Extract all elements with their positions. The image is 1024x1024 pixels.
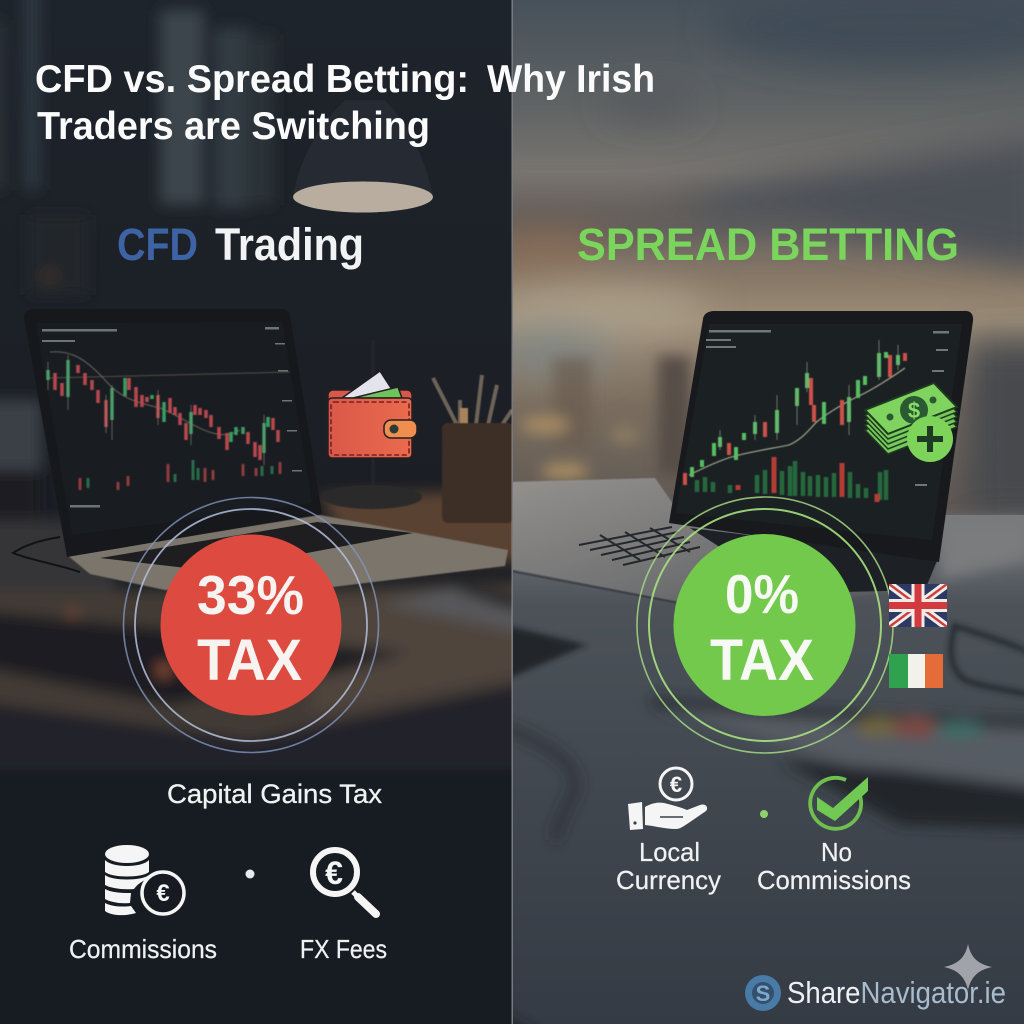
title: Traders are Switching bbox=[37, 105, 430, 148]
title: CFD vs. Spread Betting: bbox=[35, 58, 469, 101]
separator dot bbox=[760, 810, 768, 818]
label: Capital Gains Tax: Capital Gains Tax bbox=[167, 779, 383, 809]
logo: ShareNavigator.ie: S bbox=[756, 981, 770, 1006]
label: No Commissions bbox=[758, 842, 910, 890]
label: No Commissions: No bbox=[821, 837, 852, 867]
icon: magnifier with euro bbox=[313, 850, 376, 914]
icon: hand holding euro: € bbox=[670, 772, 682, 797]
icon: sparkle mark bbox=[944, 944, 992, 990]
badge: 33% tax bbox=[124, 498, 378, 752]
icon: Irish flag bbox=[889, 654, 943, 688]
laptop: CFD bbox=[24, 309, 508, 590]
icon: banknotes with plus: $ bbox=[908, 398, 920, 423]
blurred distant buildings and lights bbox=[521, 356, 690, 479]
screen menu and axis ticks bbox=[42, 327, 302, 508]
panel: CFD trading (left) bbox=[0, 0, 512, 958]
blurred office background bbox=[0, 0, 512, 766]
heading: CFD Trading: Trading bbox=[215, 219, 364, 270]
title bbox=[35, 58, 655, 148]
heading: CFD Trading bbox=[118, 227, 362, 270]
title: Why Irish bbox=[487, 58, 655, 101]
label: Local Currency: Local bbox=[639, 837, 700, 867]
label: Local Currency bbox=[616, 837, 721, 895]
label: FX Fees: FX Fees bbox=[300, 934, 387, 964]
badge: 0% tax: 0% bbox=[725, 563, 799, 625]
screen menu text bbox=[706, 330, 949, 486]
icon: coins stack with euro: € bbox=[156, 880, 170, 907]
badge: 0% tax: TAX bbox=[710, 628, 814, 693]
badge: 33% tax: TAX bbox=[197, 628, 302, 693]
icon: coins stack with euro bbox=[105, 845, 184, 915]
icon: banknotes with plus bbox=[865, 383, 957, 462]
laptop: spread betting bbox=[505, 311, 973, 607]
blurred desk objects bbox=[480, 702, 1024, 1024]
tablet at left and glasses at right bbox=[505, 625, 1024, 695]
icon: UK flag bbox=[889, 584, 947, 627]
label: Commissions: Commissions bbox=[69, 934, 217, 964]
badge: 0% tax bbox=[637, 497, 893, 753]
desk lamp bbox=[293, 100, 433, 509]
icon: magnifier with euro: € bbox=[325, 855, 343, 891]
label: Local Currency: Currency bbox=[616, 865, 721, 895]
pen cup bbox=[433, 375, 514, 523]
logo: ShareNavigator.ie: ShareNavigator.ie bbox=[787, 975, 1006, 1010]
heading: SPREAD BETTING: SPREAD BETTING bbox=[577, 219, 959, 270]
icon: check mark in circle bbox=[810, 777, 868, 829]
icon: hand holding euro bbox=[628, 768, 707, 830]
icon: wallet bbox=[328, 371, 417, 458]
separator dot bbox=[246, 870, 254, 878]
badge: 33% tax: 33% bbox=[197, 564, 304, 626]
laptop cable bbox=[13, 537, 80, 572]
candlestick chart: rising prices bbox=[685, 340, 905, 502]
panel: Spread betting (right) bbox=[480, 0, 1024, 1024]
heading: CFD Trading: CFD bbox=[117, 219, 198, 270]
divider between panels bbox=[512, 0, 513, 1024]
desk surface bbox=[513, 515, 1024, 1024]
label: No Commissions: Commissions bbox=[757, 865, 911, 895]
candlestick chart: falling prices bbox=[48, 352, 290, 490]
blurred sunset clouds bbox=[480, 0, 1024, 520]
